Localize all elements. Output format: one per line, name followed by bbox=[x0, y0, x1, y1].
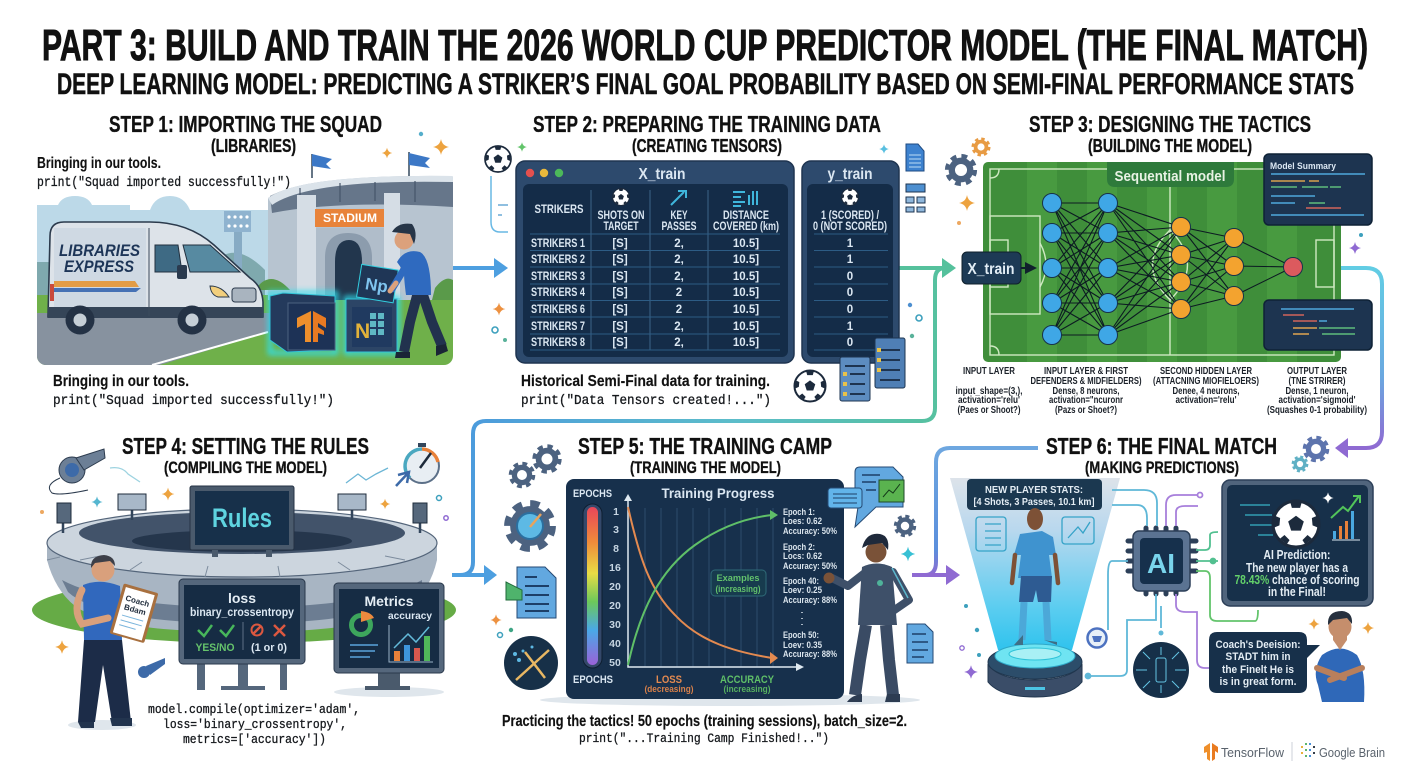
input box: X_train bbox=[962, 252, 1035, 284]
legend: loss and accuracy: (increasing) bbox=[724, 684, 770, 694]
examples callout: Examples bbox=[716, 573, 760, 583]
icon: gears near arrow bbox=[1293, 439, 1326, 471]
table: X_train: STRIKERS 1 bbox=[531, 238, 585, 250]
icon: soccer balls bbox=[485, 146, 826, 402]
table: X_train: [S] bbox=[612, 304, 628, 316]
layer labels: Denee, 4 neurons, bbox=[1172, 386, 1240, 397]
layer labels: activation='relu' bbox=[1176, 395, 1236, 406]
step 2 heading: STEP 2: PREPARING THE TRAINING DATA bbox=[533, 111, 881, 137]
board: loss bbox=[179, 579, 305, 690]
hologram player bbox=[1012, 508, 1058, 645]
layer labels: (ATTACNING MIOFIELOERS) bbox=[1153, 376, 1259, 387]
arrow: step 5 to step 6 bbox=[912, 448, 1038, 585]
numpy box: Np bbox=[364, 274, 389, 297]
step 3 subheading: (BUILDING THE MODEL) bbox=[1088, 136, 1252, 156]
epoch log: Epoch 40: bbox=[783, 576, 819, 587]
step 5 heading: STEP 5: THE TRAINING CAMP bbox=[578, 433, 832, 459]
table: X_train: 10.5] bbox=[733, 238, 759, 250]
decoration: flags and sparkles bbox=[312, 132, 449, 178]
epoch log: Epoch 50: bbox=[783, 630, 819, 641]
step 1 bottom note: Bringing in our tools. bbox=[53, 373, 189, 390]
table: X_train: TARGET bbox=[604, 221, 638, 233]
new player stats header: NEW PLAYER STATS: bbox=[985, 484, 1083, 496]
layer labels: OUTPUT LAYER bbox=[1287, 366, 1348, 377]
table: X_train: [S] bbox=[612, 287, 628, 299]
layer labels: activation='sigmoid' bbox=[1278, 395, 1356, 406]
player carrying crate bbox=[390, 224, 448, 358]
layer labels: activation='relu' bbox=[958, 395, 1020, 406]
layer labels: (Squashes 0-1 probability) bbox=[1267, 405, 1367, 416]
coach decision speech bubble: the Finelt He is bbox=[1222, 664, 1294, 676]
logo: Google Brain: Google Brain bbox=[1319, 746, 1385, 760]
chart: training progress: Training Progress bbox=[662, 485, 775, 501]
icon: documents right bbox=[906, 144, 925, 212]
caption bbox=[502, 713, 907, 746]
table: X_train: 10.5] bbox=[733, 321, 759, 333]
panel: step 2 preparing the training data bbox=[485, 111, 925, 409]
epoch log: Accuracy: 50% bbox=[783, 561, 837, 572]
table: X_train: 2, bbox=[674, 271, 684, 283]
layer labels: DEFENDERS & MIDFIELDERS) bbox=[1030, 376, 1142, 387]
chart: training progress: 8 bbox=[613, 543, 619, 555]
coach with clipboard bbox=[68, 555, 158, 730]
epoch log bbox=[783, 507, 837, 660]
icon: stat sheets bbox=[840, 338, 905, 401]
table: X_train: STRIKERS 4 bbox=[531, 287, 585, 299]
van lettering bbox=[59, 244, 140, 272]
table: X_train bbox=[516, 161, 794, 363]
table: X_train: [S] bbox=[612, 321, 628, 333]
clipboard bbox=[109, 583, 158, 643]
step 1 bottom note bbox=[53, 373, 334, 409]
table: y_train: 0 bbox=[847, 304, 853, 316]
icon: chat and chart bbox=[828, 467, 914, 535]
table: X_train: STRIKERS 2 bbox=[531, 254, 585, 266]
table: X_train: 2 bbox=[676, 287, 682, 299]
board: metrics: Metrics bbox=[364, 593, 414, 609]
chart: training progress: 20 bbox=[609, 581, 621, 593]
icon: gears and sparkles bbox=[948, 140, 1363, 254]
icon: whistles bbox=[49, 449, 165, 678]
football pitch bbox=[983, 162, 1341, 362]
table: y_train: 1 bbox=[847, 238, 854, 250]
logo: Google Brain bbox=[1301, 743, 1385, 760]
table: X_train: 10.5] bbox=[733, 287, 759, 299]
chart: training progress bbox=[540, 479, 920, 706]
layer labels: (Pazs or Shoet?) bbox=[1055, 405, 1117, 416]
examples callout: (increasing) bbox=[716, 584, 760, 594]
arrow: step 1 to step 2 bbox=[448, 258, 508, 278]
table: y_train: 0 bbox=[847, 287, 853, 299]
stadium sign: STADIUM bbox=[323, 211, 377, 225]
board: loss: loss bbox=[228, 590, 256, 606]
table: y_train: y_train bbox=[828, 166, 872, 183]
neural network bbox=[1042, 194, 1302, 344]
scoreboard: rules bbox=[190, 486, 294, 557]
hologram beam bbox=[950, 478, 1120, 650]
stadium sign bbox=[315, 209, 384, 227]
epoch log: Epoch 1: bbox=[783, 507, 815, 518]
step 4 heading: STEP 4: SETTING THE RULES bbox=[122, 433, 369, 459]
library crates bbox=[270, 264, 398, 353]
legend: loss and accuracy bbox=[644, 674, 775, 694]
table: X_train: STRIKERS 6 bbox=[531, 304, 585, 316]
panel: step 5 the training camp bbox=[490, 433, 933, 746]
decoration: step 6 sparkles and small soccer icon bbox=[960, 604, 1374, 679]
decoration: step 4 sparkles and squiggles bbox=[40, 468, 448, 654]
coach decision speech bubble: STADT him in bbox=[1226, 651, 1291, 663]
legend: loss and accuracy: (decreasing) bbox=[644, 684, 694, 694]
van lettering: EXPRESS bbox=[64, 257, 135, 276]
screen: AI prediction: The new player has a bbox=[1246, 561, 1349, 575]
table: X_train: 2, bbox=[674, 238, 684, 250]
table: X_train: KEY bbox=[670, 210, 688, 222]
table: X_train: DISTANCE bbox=[723, 210, 769, 222]
new player stats header bbox=[967, 479, 1102, 510]
chart: training progress: 50 bbox=[609, 657, 621, 669]
epoch log: Accuracy: 88% bbox=[783, 649, 837, 660]
chart: training progress: 30 bbox=[609, 619, 621, 631]
step 1 subheading: (LIBRARIES) bbox=[211, 136, 296, 156]
chart: training progress: 1 bbox=[613, 506, 619, 518]
holographic platform bbox=[988, 644, 1082, 697]
screen: AI prediction: AI Prediction: bbox=[1264, 548, 1330, 562]
screen: AI prediction: 78.43% chance of scoring bbox=[1234, 573, 1360, 587]
epoch log: Accuracy: 50% bbox=[783, 526, 837, 537]
layer labels: input_shape=(3,), bbox=[956, 386, 1023, 397]
gradient epoch bar bbox=[583, 504, 602, 668]
table: X_train: 2, bbox=[674, 337, 684, 349]
delivery van bbox=[48, 222, 263, 334]
table: y_train: 1 (SCORED) / bbox=[821, 210, 880, 222]
chart: training progress: 40 bbox=[609, 638, 621, 650]
decoration: step 2 dots and pipeline bbox=[491, 142, 922, 342]
badge: sequential model bbox=[1107, 162, 1234, 187]
caption: Practicing the tactics! 50 epochs (training sessions), batch_size=2. bbox=[502, 713, 907, 730]
icon: stopwatch gauge bbox=[396, 443, 439, 486]
screen: AI prediction bbox=[1222, 480, 1373, 606]
scoreboard: rules: Rules bbox=[212, 503, 272, 533]
table: X_train: STRIKERS 3 bbox=[531, 271, 585, 283]
step 3 heading: STEP 3: DESIGNING THE TACTICS bbox=[1029, 111, 1311, 137]
library crates: N bbox=[355, 320, 370, 343]
caption: print("...Training Camp Finished!..") bbox=[579, 731, 829, 746]
trainer figure bbox=[824, 534, 909, 702]
table: X_train: [S] bbox=[612, 238, 628, 250]
new player stats header: [4 Shots, 3 Passes, 10.1 km] bbox=[974, 496, 1094, 508]
AI chip: AI bbox=[1147, 548, 1175, 579]
table: y_train: 0 (NOT SCORED) bbox=[813, 221, 887, 233]
layer labels: INPUT LAYER & FIRST bbox=[1044, 366, 1128, 377]
layer labels: Dense, 8 neurons, bbox=[1052, 386, 1120, 397]
epoch log: Epoch 2: bbox=[783, 542, 815, 553]
legend: loss and accuracy: LOSS bbox=[656, 674, 682, 686]
coach decision speech bubble bbox=[1209, 632, 1320, 693]
panel: step 4 setting the rules bbox=[32, 433, 456, 747]
van lettering: LIBRARIES bbox=[59, 241, 141, 260]
hologram icons bbox=[976, 517, 1094, 551]
table: X_train: X_train bbox=[638, 166, 686, 183]
chart: training progress: EPOCHS bbox=[573, 488, 612, 500]
table: X_train: STRIKERS 8 bbox=[531, 337, 585, 349]
board: loss: binary_crossentropy bbox=[190, 605, 294, 619]
board: loss: YES/NO bbox=[196, 642, 235, 654]
floodlights bbox=[57, 494, 427, 533]
circuit lines bbox=[1086, 490, 1258, 678]
icon: tactic board bbox=[504, 636, 558, 690]
table: X_train: PASSES bbox=[662, 221, 697, 233]
board: metrics: accuracy bbox=[388, 611, 432, 622]
illustration: van delivering libraries to stadium bbox=[37, 176, 453, 368]
table: X_train: 10.5] bbox=[733, 304, 759, 316]
epoch log: Accuracy: 88% bbox=[783, 595, 837, 606]
step 1 heading: STEP 1: IMPORTING THE SQUAD bbox=[109, 111, 382, 137]
icon: gear with compass bbox=[510, 506, 550, 546]
table: X_train: 2, bbox=[674, 254, 684, 266]
table: X_train: [S] bbox=[612, 271, 628, 283]
layer labels: INPUT LAYER bbox=[963, 366, 1016, 377]
step 2 caption: print("Data Tensors created!...") bbox=[521, 394, 771, 409]
layer labels bbox=[956, 366, 1367, 416]
layer labels: SECOND HIDDEN LAYER bbox=[1160, 366, 1253, 377]
table: X_train: 2 bbox=[676, 304, 682, 316]
arrow: step 3 to step 6 bbox=[1323, 268, 1382, 458]
chart: training progress: 16 bbox=[609, 562, 621, 574]
board: loss: (1 or 0) bbox=[251, 642, 287, 654]
table: X_train: COVERED (km) bbox=[713, 221, 779, 233]
coach with crossed arms bbox=[1316, 611, 1364, 702]
coach decision speech bubble: is in great form. bbox=[1220, 676, 1296, 688]
step 6 heading: STEP 6: THE FINAL MATCH bbox=[1046, 433, 1277, 459]
input box: X_train: X_train bbox=[968, 261, 1014, 278]
table: X_train: SHOTS ON bbox=[598, 210, 644, 222]
badge: sequential model: Sequential model bbox=[1114, 168, 1226, 185]
chart: training progress: 20 bbox=[609, 600, 621, 612]
layer labels: Dense, 1 neuron, bbox=[1286, 386, 1349, 397]
stadium illustration bbox=[32, 494, 456, 643]
step 5 subheading: (TRAINING THE MODEL) bbox=[630, 458, 781, 477]
table: X_train: 10.5] bbox=[733, 254, 759, 266]
panel: model summary bbox=[1264, 154, 1372, 225]
board: metrics bbox=[334, 583, 444, 697]
legend: loss and accuracy: ACCURACY bbox=[720, 674, 775, 686]
table: y_train: 1 bbox=[847, 254, 854, 266]
table: y_train bbox=[802, 161, 899, 363]
step 2 subheading: (CREATING TENSORS) bbox=[632, 136, 782, 156]
logo: TensorFlow bbox=[1204, 743, 1285, 761]
table: X_train: STRIKERS bbox=[534, 204, 584, 216]
layer labels: (Paes or Shoot?) bbox=[958, 405, 1020, 416]
screen: AI prediction: in the Final! bbox=[1268, 585, 1326, 599]
step 4 code bbox=[148, 702, 360, 747]
step 4 code: metrics=['accuracy']) bbox=[183, 732, 326, 747]
step 4 code: model.compile(optimizer='adam', bbox=[148, 702, 360, 717]
logo: TensorFlow: TensorFlow bbox=[1221, 746, 1285, 760]
panel: step 3 designing the tactics bbox=[948, 111, 1372, 416]
layer labels: activation="ncuronr bbox=[1049, 395, 1123, 406]
clipboard: Bdam bbox=[123, 603, 147, 617]
icon: document bbox=[506, 567, 556, 618]
step 6 subheading: (MAKING PREDICTIONS) bbox=[1085, 458, 1239, 477]
chart: training progress: 3 bbox=[613, 524, 619, 536]
epoch log: Locs: 0.62 bbox=[783, 551, 822, 562]
table: y_train: 0 bbox=[847, 271, 853, 283]
layer labels: (TNE STRIRER) bbox=[1288, 376, 1346, 387]
epoch log: Loes: 0.62 bbox=[783, 516, 822, 527]
panel: step 6 the final match bbox=[950, 433, 1374, 702]
step 4 subheading: (COMPILING THE MODEL) bbox=[164, 458, 327, 477]
epoch log: Loev: 0.25 bbox=[783, 585, 823, 596]
step 4 code: loss='binary_crossentropy', bbox=[163, 717, 347, 732]
step 1 top note: Bringing in our tools. bbox=[37, 155, 161, 172]
icon: gears bbox=[512, 447, 559, 485]
epoch log: Loev: 0.35 bbox=[783, 640, 823, 651]
step 1 bottom note: print("Squad imported successfully!") bbox=[53, 393, 334, 409]
table: X_train: 10.5] bbox=[733, 271, 759, 283]
network node badge bbox=[1133, 630, 1189, 698]
panel: step 1 importing the squad bbox=[37, 111, 453, 409]
table: X_train: [S] bbox=[612, 254, 628, 266]
coach decision speech bubble: Coach's Deeision: bbox=[1216, 639, 1300, 651]
table: X_train: [S] bbox=[612, 337, 628, 349]
table: X_train: 10.5] bbox=[733, 337, 759, 349]
panel: code snippet bbox=[1264, 300, 1372, 350]
examples callout bbox=[711, 570, 766, 596]
arrow: step 2 to step 3 and step 5 bbox=[452, 258, 956, 585]
chart: training progress: EPOCHS bbox=[573, 674, 613, 686]
table: y_train: 1 bbox=[847, 321, 854, 333]
AI chip bbox=[1128, 528, 1196, 594]
panel: model summary: Model Summary bbox=[1270, 161, 1337, 172]
step 2 caption bbox=[521, 373, 771, 409]
step 1 top note bbox=[37, 155, 291, 191]
table: y_train: 0 bbox=[847, 337, 853, 349]
decoration: step 5 sparkles and side document bbox=[490, 547, 933, 663]
table: X_train: 2, bbox=[674, 321, 684, 333]
footer logos bbox=[1204, 742, 1385, 761]
step 1 top note: print("Squad imported successfully!") bbox=[37, 176, 291, 191]
table: X_train: STRIKERS 7 bbox=[531, 321, 585, 333]
clipboard: Coach bbox=[124, 594, 151, 609]
step 2 caption: Historical Semi-Final data for training. bbox=[521, 373, 770, 390]
